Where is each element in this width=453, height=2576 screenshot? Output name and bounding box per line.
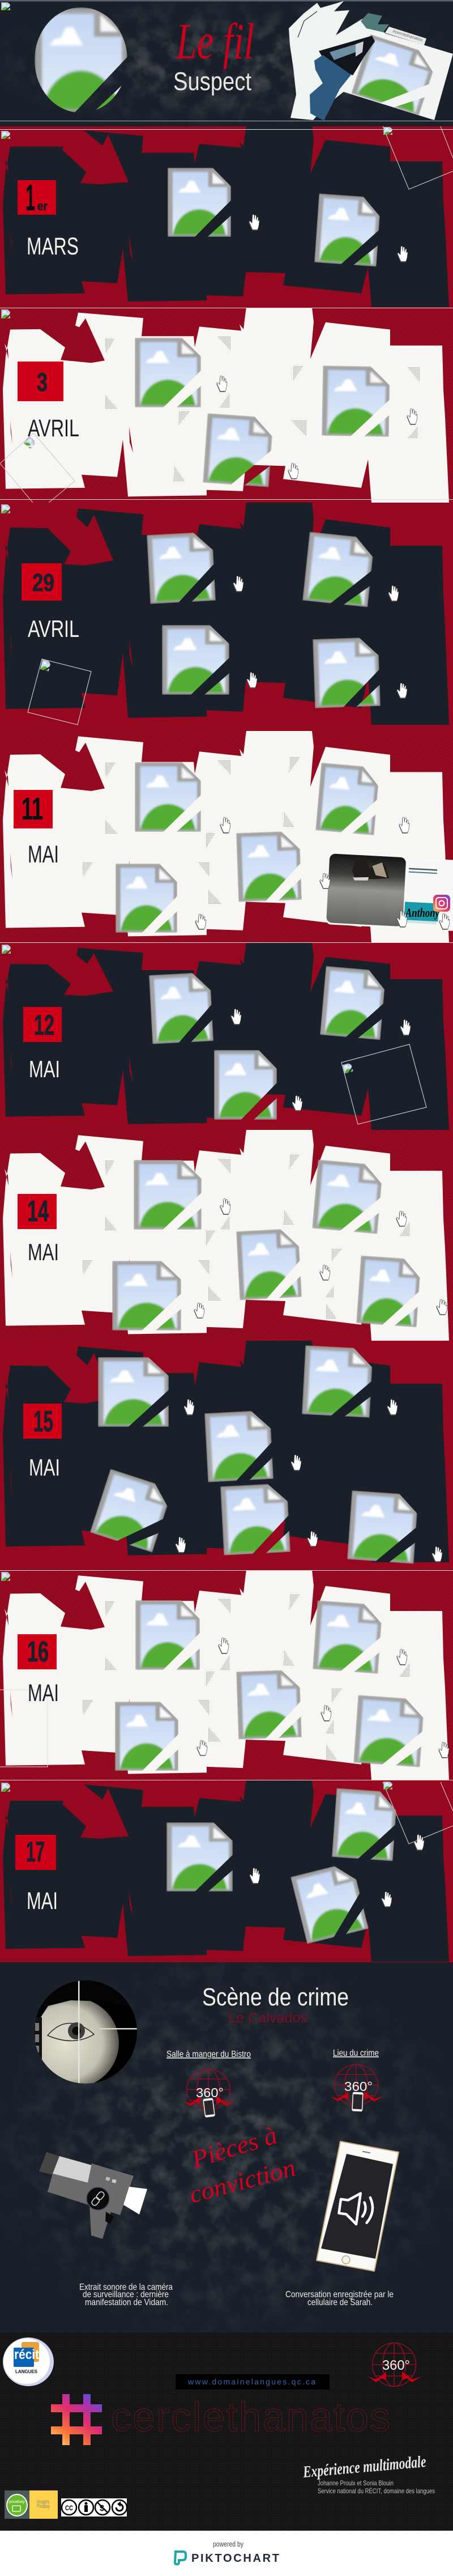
badge: Creative Commons licence: $: [100, 2503, 105, 2513]
date month: MAI: MAI: [29, 1454, 60, 1481]
frame: thin rotated picture frame: [28, 659, 91, 725]
credit: authors: Johanne Proulx et Sonia Blouin: [318, 2479, 394, 2487]
date month: MAI: MAI: [29, 1056, 60, 1082]
media thumbnails and cursors: [80, 1345, 442, 1597]
media thumbnails and cursors: [135, 338, 417, 521]
panel: 17 mai: [0, 1780, 453, 1976]
illustration: brush stroke, photo frame and hand holding phone: #cerclethanatos: [392, 28, 424, 42]
date month: MAI: MAI: [27, 1888, 58, 1915]
date badge: 14: [18, 1194, 57, 1229]
panel: 11 mai: [0, 731, 453, 966]
date badge: 15: [23, 1404, 62, 1439]
illustration: brush stroke, photo frame and hand holding phone: [289, 1, 453, 144]
icon: 360 globe, crime location: [330, 2064, 383, 2111]
logo: récit langues: [3, 2337, 54, 2386]
date badge: 17: [15, 1835, 56, 1870]
icon: gradient hash: [51, 2394, 102, 2445]
halftone triangles: [82, 1154, 410, 1319]
icon: 360 globe, crime location: 360°: [344, 2079, 373, 2094]
panel: 3 avril: [0, 308, 453, 521]
date month: AVRIL: AVRIL: [28, 615, 79, 642]
icon: 360 globe, dining room: 360°: [196, 2085, 224, 2100]
date badge: 11: [14, 790, 53, 828]
label: Salle à manger du Bistro: Salle à manger du Bistro: [166, 2050, 251, 2059]
image: eye in crosshair: [34, 1980, 137, 2084]
subtitle: Suspect: Suspect: [173, 67, 251, 96]
caption: phone recording: Conversation enregistrée par le: [285, 2290, 394, 2299]
panel: header: [0, 0, 453, 126]
date badge: 15: 15: [33, 1405, 53, 1438]
panel: 1er mars: [0, 126, 453, 308]
badge: Creative Commons licence: CC: [65, 2504, 73, 2512]
media thumbnails and cursors: [149, 966, 411, 1153]
heading: Scène de crime: Scène de crime: [202, 1983, 349, 2011]
panel: 12 mai: [0, 943, 453, 1153]
date month: MAI: MAI: [28, 1239, 59, 1265]
media thumbnails and cursors: [147, 532, 407, 742]
date badge: 17: 17: [26, 1836, 45, 1868]
date badge: 16: [18, 1634, 57, 1669]
label: Lieu du crime: Lieu du crime: [333, 2048, 379, 2058]
frame: faint picture frame: [0, 1690, 48, 1767]
panel: footer: [0, 2332, 453, 2531]
date badge: 1er: 1: [25, 177, 35, 218]
heading: Pièces à conviction: conviction: [186, 2154, 298, 2209]
badge: Pixabay images: [5, 2490, 58, 2519]
media thumbnails: [116, 762, 380, 966]
social post card: Instagram: [326, 853, 453, 931]
logo: Piktochart wordmark: PIKTOCHART: [191, 2552, 279, 2565]
caption: camera audio: [79, 2282, 173, 2307]
date badge: 11: 11: [22, 791, 43, 826]
media thumbnails and cursors: [166, 1788, 424, 1976]
hashtag: cerclethanatos: cerclethanatos: [111, 2395, 390, 2440]
link: website url: www.domainelangues.qc.ca: [187, 2377, 315, 2386]
heading: Pièces à conviction: Pièces à: [188, 2121, 280, 2174]
subheading: Le Calvados: Le Calvados: [228, 2010, 307, 2026]
credit: authors: [318, 2479, 435, 2495]
date badge: 14: 14: [27, 1195, 49, 1228]
date badge: 3: 3: [37, 368, 48, 397]
date badge: 29: 29: [32, 569, 54, 597]
title: Le fil: Le fil: [176, 14, 254, 70]
date badge: 1er: er: [37, 200, 48, 213]
date badge: 3: [18, 362, 63, 401]
media thumbnails and cursors: [168, 168, 408, 300]
image: oval broken picture: [35, 7, 127, 112]
frame: thin rotated picture frame: [341, 1044, 426, 1124]
media thumbnails and cursors: [115, 1600, 449, 1804]
frame: thin rotated picture frame: [383, 126, 453, 189]
caption: phone recording: cellulaire de Sarah.: [307, 2298, 373, 2307]
logo: récit langues: récit: [14, 2347, 39, 2362]
heading: Pièces à conviction: [186, 2121, 298, 2209]
text: powered by: powered by: [213, 2540, 243, 2548]
panel: 16 mai: [0, 1570, 453, 1804]
logo: récit langues: LANGUES: [15, 2369, 37, 2374]
caption: camera audio: de surveillance : dernière: [83, 2290, 169, 2299]
frame: thin rotated picture frame: [0, 433, 75, 503]
panel: powered by Piktochart: [0, 2531, 453, 2576]
badge: Creative Commons licence: [61, 2498, 127, 2517]
panel: 15 mai: [0, 1341, 453, 1597]
icon: 360 globe, dining room: [182, 2069, 236, 2118]
logo: Piktochart mark: [175, 2552, 186, 2564]
badge: Pixabay images: Images: [37, 2499, 49, 2505]
cursors: [195, 817, 450, 930]
badge: Pixabay images: Pixabay: [37, 2503, 50, 2510]
caption: phone recording: [285, 2290, 394, 2307]
link: website url: [176, 2374, 330, 2390]
date badge: 12: [23, 1007, 62, 1042]
panel: 14 mai: [0, 1130, 453, 1364]
date month: AVRIL: AVRIL: [28, 415, 79, 442]
date month: MAI: MAI: [28, 1680, 59, 1707]
date badge: 16: 16: [27, 1635, 49, 1668]
icon: 360 globe: 360°: [382, 2358, 410, 2373]
frame: thin rotated picture frame: [383, 1782, 453, 1844]
halftone triangles: [82, 757, 300, 904]
social post card: Instagram: Anthony: [404, 906, 439, 920]
panel: crime scene: [0, 1962, 453, 2332]
date month: MAI: MAI: [28, 841, 59, 868]
date badge: 29: [22, 563, 62, 601]
caption: camera audio: manifestation de Vidam.: [85, 2298, 168, 2307]
date badge: 1er: [18, 177, 56, 218]
caption: camera audio: Extrait sonore de la caméra: [79, 2282, 173, 2292]
illustration: video camera: [39, 2152, 147, 2239]
badge: Pixabay images: pixabay: [9, 2500, 25, 2504]
media thumbnails and cursors: [112, 1159, 447, 1364]
date badge: 12: 12: [34, 1009, 54, 1041]
halftone triangles: [82, 1595, 410, 1759]
panel: 29 avril: [0, 503, 453, 742]
illustration: phone with speaker icon: [317, 2141, 399, 2271]
icon: 360 globe: [368, 2343, 421, 2387]
halftone triangles: [105, 337, 420, 482]
date month: MARS: MARS: [27, 233, 79, 260]
